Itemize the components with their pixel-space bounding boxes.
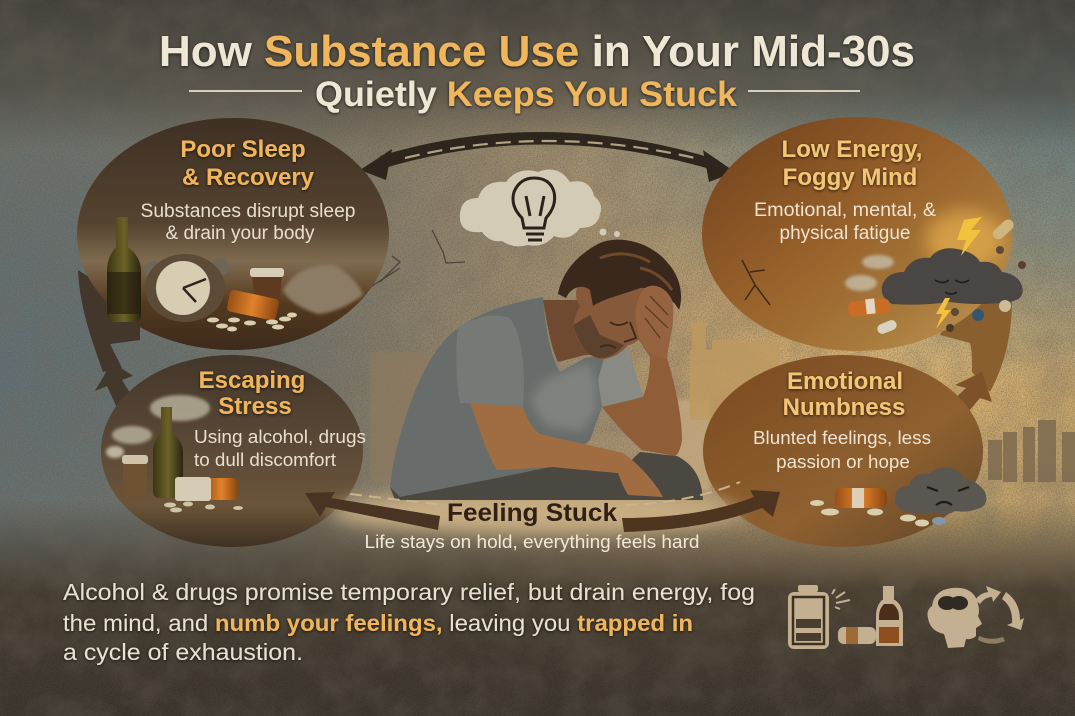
description (753, 427, 931, 472)
title (159, 27, 915, 114)
left sleeve (456, 316, 524, 407)
icon: fallen pill bottle (175, 477, 238, 501)
heading: Foggy Mind (783, 164, 917, 191)
icon: thought bubble with lightbulb (460, 170, 620, 246)
icon: cycle arrows (975, 586, 1024, 644)
glow (925, 210, 1005, 270)
icon: pill bottle (226, 289, 280, 321)
panel: poor sleep (77, 118, 389, 350)
description: to dull discomfort (194, 449, 337, 470)
cracks in wall (366, 230, 465, 290)
description: Blunted feelings, less (753, 427, 931, 448)
heading: Low Energy, (782, 136, 922, 163)
panel: emotional numbness (703, 355, 986, 547)
shirt chest highlight (530, 362, 598, 432)
title: Quietly Keeps You Stuck (315, 75, 738, 114)
shirt torso (390, 297, 643, 497)
near arm (470, 403, 663, 497)
cycle arrow: bottom right (622, 482, 780, 532)
icon: pill small (838, 627, 876, 644)
description: Using alcohol, drugs (194, 426, 366, 447)
horizon landscape (370, 352, 710, 490)
beard (573, 315, 624, 358)
ear (576, 281, 592, 307)
icon: capsules (847, 298, 898, 335)
hair highlights (600, 254, 672, 290)
bottom summary text (63, 579, 755, 665)
bottom summary text: a cycle of exhaustion. (63, 639, 303, 665)
icon: pills (164, 502, 243, 512)
cycle arrow: right (932, 300, 1012, 436)
cracks (742, 260, 770, 305)
title rule left (189, 90, 302, 92)
icon: coffee cup (250, 268, 284, 304)
far arm (602, 289, 682, 456)
icon: bottle (153, 407, 183, 498)
hand on forehead (636, 286, 673, 358)
icon: whisky bottle (876, 586, 903, 646)
description: Emotional, mental, & (754, 200, 936, 221)
icon: alarm clock (144, 254, 229, 322)
cycle arrow: bottom left (305, 492, 445, 530)
heading: Poor Sleep (180, 136, 306, 163)
heading: & Recovery (182, 164, 315, 191)
description (194, 426, 366, 470)
icon: spark lines (832, 589, 850, 609)
icon: jar (122, 455, 148, 497)
icon: sad cloud (895, 468, 986, 514)
face (573, 281, 650, 359)
center label: feeling stuck (364, 499, 700, 552)
finger lines (645, 296, 668, 338)
heading: Emotional (787, 368, 903, 395)
pants (390, 452, 703, 500)
icon: smoke (106, 395, 210, 458)
bottom summary text: Alcohol & drugs promise temporary relief, but drain energy, fog (63, 579, 755, 605)
description (754, 200, 936, 244)
icon: capsule (835, 488, 887, 508)
heading: Stress (218, 393, 292, 420)
figure: seated man (390, 240, 703, 500)
heading (783, 368, 905, 421)
panel: escaping stress (101, 355, 366, 547)
icon: rock (283, 265, 363, 314)
heading (782, 136, 922, 191)
cycle arrow: top (360, 132, 735, 182)
heading: Numbness (783, 394, 905, 421)
cycle arrow: left (78, 270, 143, 425)
heading: Feeling Stuck (447, 499, 617, 527)
description: physical fatigue (780, 223, 910, 244)
icon: scattered pills (207, 312, 297, 332)
description (140, 201, 356, 244)
title rule right (748, 90, 860, 92)
bottom summary text: the mind, and numb your feelings, leaving you trapped in (63, 610, 693, 636)
description: Substances disrupt sleep (140, 201, 356, 222)
icon: low battery (788, 585, 829, 649)
distant city skyline (690, 322, 1075, 482)
icon: bottle (107, 217, 141, 322)
description: & drain your body (166, 223, 315, 244)
description: passion or hope (776, 451, 910, 472)
facial features (600, 322, 636, 348)
heading (199, 367, 305, 420)
icon: storm cloud (882, 217, 1026, 332)
feeling stuck banner (330, 490, 740, 534)
heading: Escaping (199, 367, 305, 394)
neck (543, 300, 600, 362)
panel: low energy (702, 117, 1026, 351)
description: Life stays on hold, everything feels hard (364, 532, 700, 552)
icon: small clouds (845, 255, 894, 291)
heading (180, 136, 315, 191)
icon: pills (810, 500, 946, 526)
hair (558, 240, 681, 310)
title: How Substance Use in Your Mid-30s (159, 27, 915, 76)
right sleeve (598, 347, 643, 407)
icon: head with speech bubbles (928, 588, 982, 648)
